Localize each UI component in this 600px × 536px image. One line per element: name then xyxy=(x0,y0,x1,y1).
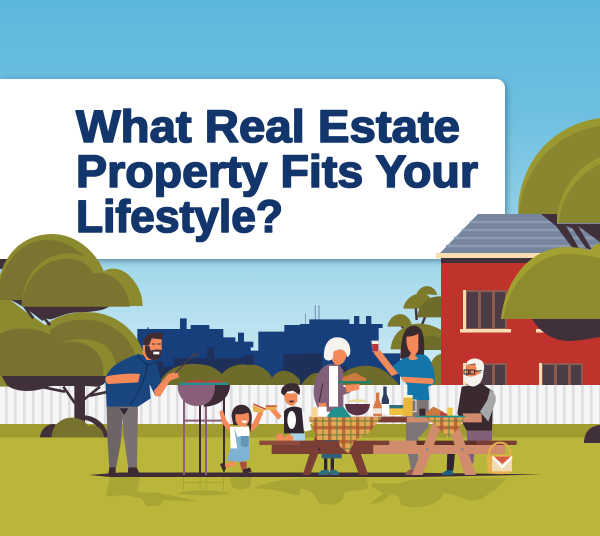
overalls xyxy=(227,427,249,462)
drink glass xyxy=(447,408,453,417)
middle lobe inner xyxy=(22,259,129,307)
orange bottle xyxy=(373,393,382,416)
person: woman in teal xyxy=(371,326,435,475)
branches xyxy=(23,305,50,325)
raised arm xyxy=(373,350,404,376)
neck and face xyxy=(143,338,162,360)
basket xyxy=(487,443,513,474)
boots xyxy=(447,453,455,471)
lower window right xyxy=(539,363,583,386)
title card xyxy=(0,79,505,259)
title: Lifestyle? xyxy=(76,191,283,242)
person: girl xyxy=(219,404,266,473)
plate xyxy=(343,373,366,382)
shoes xyxy=(274,446,293,450)
left dark roof xyxy=(0,259,8,269)
mouth xyxy=(153,352,159,354)
legs left frame xyxy=(303,422,331,475)
small plate xyxy=(389,405,403,415)
forearm xyxy=(401,377,434,384)
bolts xyxy=(318,448,320,451)
shirt oval xyxy=(287,411,296,429)
face xyxy=(466,365,480,382)
dark bush right xyxy=(584,425,600,443)
dome inner xyxy=(503,254,600,319)
salt shaker xyxy=(419,409,425,417)
wall xyxy=(441,258,600,386)
bowl of food xyxy=(347,399,368,402)
beard and hair xyxy=(463,358,484,387)
roof xyxy=(440,214,600,253)
dark bottle xyxy=(382,387,389,414)
skyline right part xyxy=(300,305,400,385)
sky background xyxy=(0,0,600,390)
legs xyxy=(276,433,284,443)
beam xyxy=(272,445,373,454)
bowl xyxy=(203,385,230,407)
foliage back dome xyxy=(43,312,144,376)
upper window left xyxy=(460,290,511,332)
table food and drinks xyxy=(312,387,465,417)
ground reflections xyxy=(106,477,300,506)
shorts xyxy=(290,433,305,442)
top xyxy=(393,354,435,400)
foliage back dome inner xyxy=(50,320,135,376)
beard xyxy=(145,345,162,360)
cardigan xyxy=(314,364,352,412)
skirt and legs xyxy=(322,437,342,458)
bench xyxy=(259,441,300,445)
outer dome xyxy=(0,234,104,300)
hand xyxy=(345,384,359,393)
person: boy xyxy=(265,383,312,450)
food platter xyxy=(426,407,447,416)
plaid cloth small xyxy=(426,417,465,438)
title: Property Fits Your xyxy=(76,146,478,197)
fence xyxy=(0,385,600,424)
ground reflections right xyxy=(300,478,507,507)
handle xyxy=(489,443,511,457)
legs right frame xyxy=(412,422,443,475)
hand xyxy=(463,413,482,422)
foliage dark underside xyxy=(2,376,108,391)
forearms xyxy=(105,374,140,384)
vest xyxy=(457,383,493,431)
tree: lower right xyxy=(501,243,600,341)
title: What Real Estate xyxy=(76,101,460,152)
shoes xyxy=(318,470,339,475)
inner lobe xyxy=(559,164,600,223)
beer jug xyxy=(403,395,416,416)
title xyxy=(76,101,478,242)
hair xyxy=(324,337,350,361)
raised arms xyxy=(219,410,232,431)
napkin xyxy=(318,407,327,417)
eave xyxy=(436,253,600,258)
arm line xyxy=(319,383,323,402)
tree: upper left xyxy=(0,234,143,325)
tree: lower left xyxy=(0,299,144,430)
bushes behind fence xyxy=(157,364,400,386)
upper window right sill xyxy=(536,329,576,332)
eyes xyxy=(152,342,161,345)
foliage back left xyxy=(0,299,50,387)
face xyxy=(407,333,418,360)
shoes xyxy=(108,467,116,475)
outer dome rim xyxy=(518,118,600,214)
outer dome inner xyxy=(0,240,93,300)
sleeve xyxy=(480,390,496,422)
trunk and branches xyxy=(43,378,108,430)
upper accent xyxy=(590,243,600,256)
roof shingle bands xyxy=(446,222,600,246)
inner lobe rim xyxy=(557,157,600,223)
background tree behind woman xyxy=(387,286,442,385)
hair xyxy=(400,326,424,362)
dark ground shadow xyxy=(89,472,543,477)
socks xyxy=(277,443,292,446)
trousers xyxy=(467,431,492,463)
wall top shadow xyxy=(441,258,600,263)
trousers xyxy=(107,405,123,468)
hot dog xyxy=(252,405,265,413)
cloth xyxy=(492,457,512,471)
table top xyxy=(309,417,482,422)
white top xyxy=(230,427,249,450)
smile xyxy=(241,421,247,423)
plaid cloth large xyxy=(310,417,382,453)
shirt xyxy=(105,354,162,407)
face xyxy=(331,350,347,365)
smile xyxy=(289,401,294,403)
bush beside trunk xyxy=(40,415,108,437)
dome rim xyxy=(501,247,600,319)
dark underside xyxy=(532,319,600,341)
person: grandfather xyxy=(442,358,496,475)
city skyline xyxy=(137,318,300,385)
dark underside xyxy=(10,299,113,319)
legs xyxy=(223,460,236,469)
middle lobe rim xyxy=(22,253,130,307)
lower window left xyxy=(463,363,507,386)
foliage middle rim xyxy=(57,339,117,376)
grill xyxy=(178,380,230,475)
face xyxy=(284,393,297,406)
house xyxy=(436,214,600,386)
shoes xyxy=(220,463,226,471)
legs xyxy=(184,397,224,475)
grate xyxy=(179,383,228,385)
outer dome xyxy=(519,126,600,214)
white fold xyxy=(493,457,512,467)
glasses xyxy=(464,370,482,374)
trousers xyxy=(406,398,429,473)
tree: upper right xyxy=(518,118,600,250)
shoe xyxy=(405,469,415,475)
food xyxy=(184,380,224,383)
shirt xyxy=(284,407,304,433)
grass xyxy=(0,424,600,536)
right lobe xyxy=(103,269,143,306)
face xyxy=(235,413,249,427)
hair xyxy=(143,333,163,345)
red flap xyxy=(494,457,511,464)
hair xyxy=(281,383,300,396)
glass xyxy=(371,341,379,352)
body xyxy=(487,455,513,474)
person: man at grill xyxy=(105,333,199,475)
foliage front lobes xyxy=(0,328,103,376)
arm and hot dog xyxy=(268,407,282,420)
grill fork xyxy=(175,352,199,373)
white shirt xyxy=(329,366,338,407)
person: grandmother xyxy=(314,337,371,475)
tray xyxy=(415,416,465,417)
picnic table xyxy=(259,417,517,475)
cup xyxy=(312,407,318,417)
branches and underside xyxy=(541,214,600,250)
teal plate xyxy=(327,407,350,416)
hair xyxy=(232,405,252,433)
right sleeve xyxy=(298,408,312,432)
